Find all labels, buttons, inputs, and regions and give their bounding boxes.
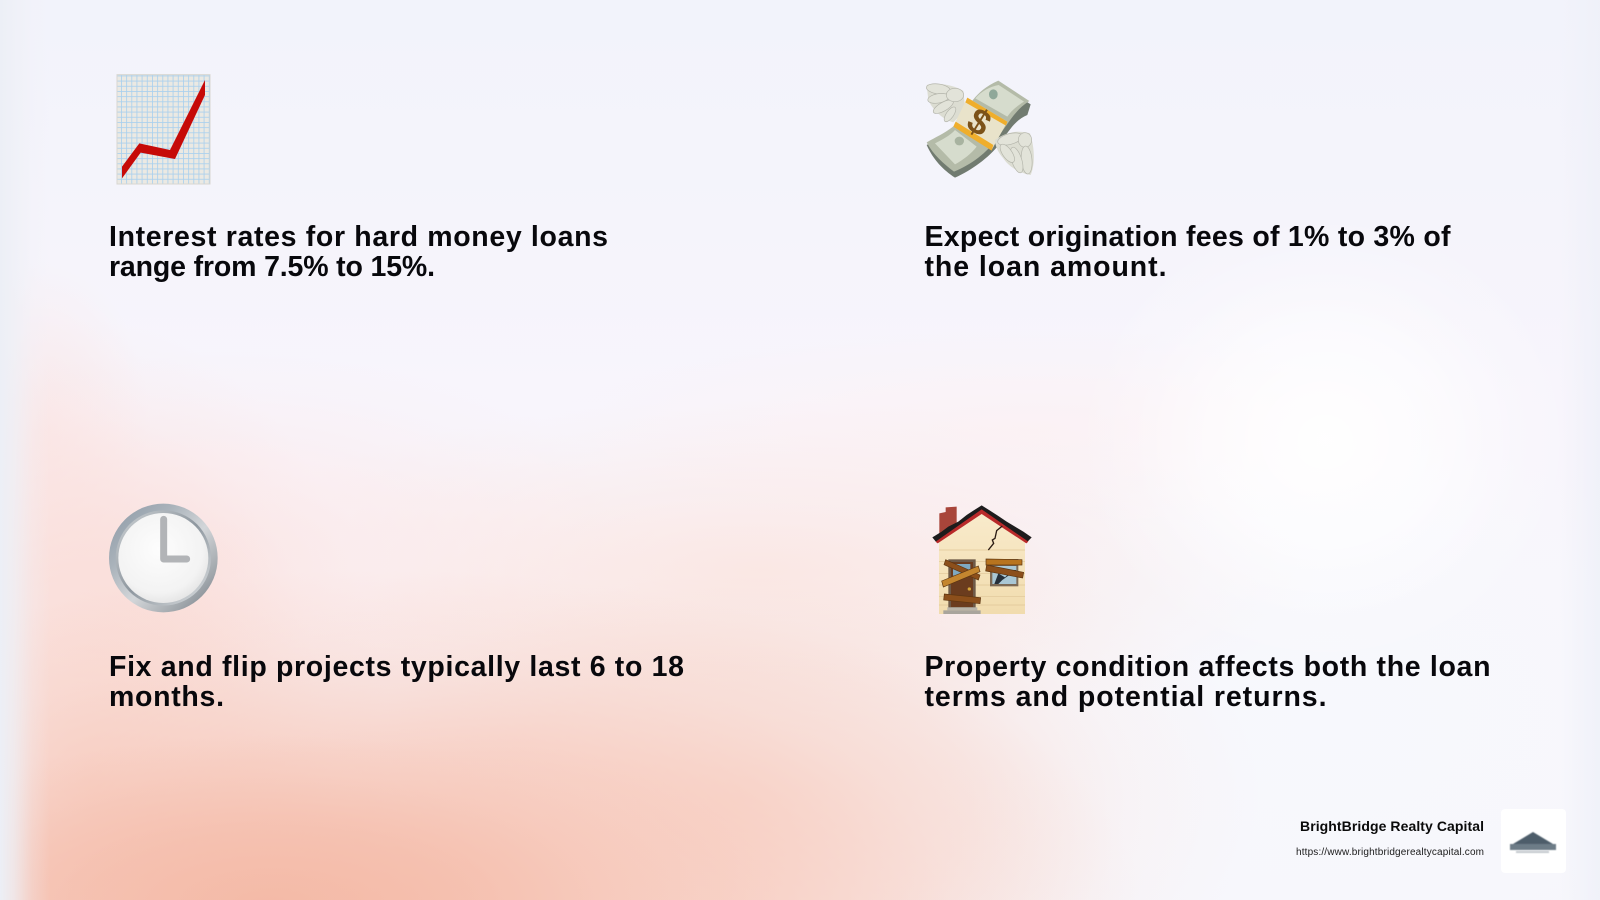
panel: project timeline <box>109 504 684 713</box>
panel: property condition <box>924 505 1490 713</box>
text: property condition: Property condition affects both the loan <box>924 651 1490 683</box>
footer: brand <box>1296 809 1566 873</box>
panel: interest rates <box>109 75 608 283</box>
text: project timeline: months. <box>109 681 224 713</box>
icon: money with wings: $ <box>960 99 999 144</box>
text: origination fees: Expect origination fees of 1% to 3% of <box>924 221 1451 253</box>
text: property condition: terms and potential returns. <box>924 681 1326 713</box>
text: website url: https://www.brightbridgerealtycapital.com <box>1296 847 1484 858</box>
text: interest rates: Interest rates for hard money loans <box>109 221 608 253</box>
icon: rising chart <box>117 75 210 184</box>
icon: money with wings <box>926 81 1034 178</box>
icon: clock <box>109 504 218 612</box>
text: interest rates: range from 7.5% to 15%. <box>109 251 435 283</box>
icon: derelict house <box>932 505 1032 614</box>
text: company name: BrightBridge Realty Capital <box>1300 818 1484 834</box>
text: project timeline: Fix and flip projects typically last 6 to 18 <box>109 651 684 683</box>
panel: origination fees <box>924 81 1451 283</box>
logo card <box>1501 809 1566 873</box>
text: origination fees: the loan amount. <box>924 251 1166 283</box>
